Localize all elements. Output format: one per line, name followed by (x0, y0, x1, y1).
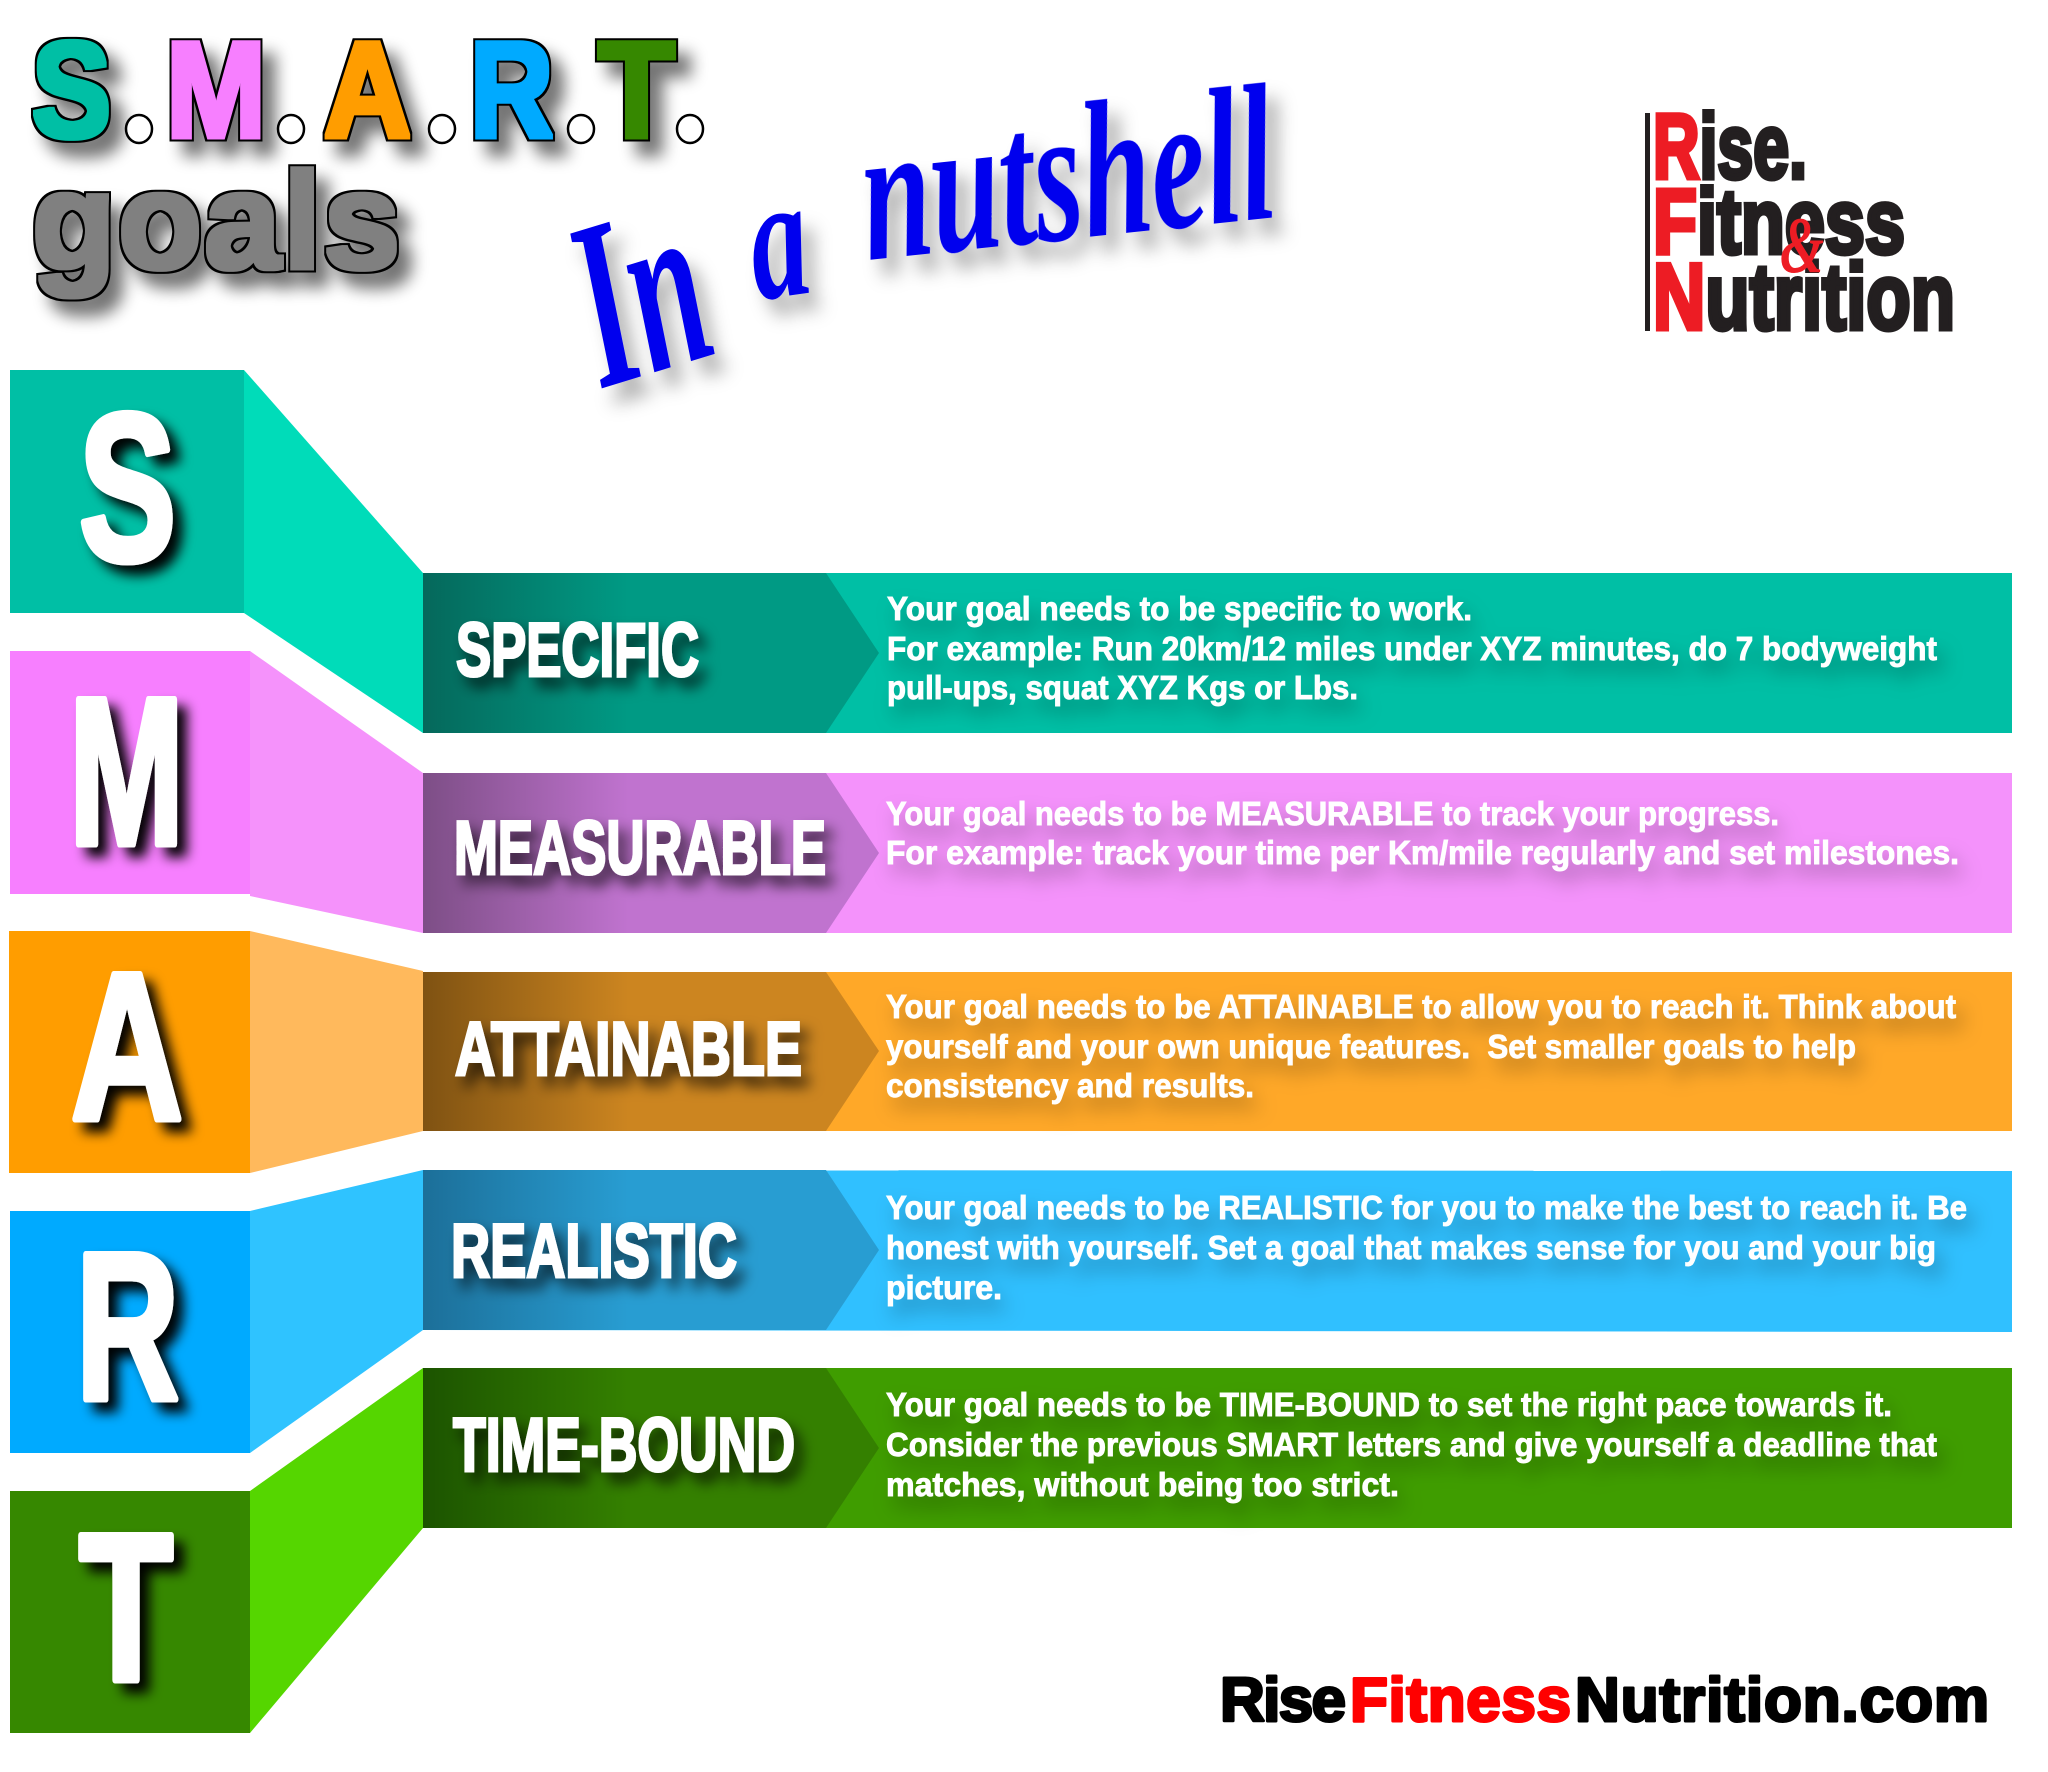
description T: Your goal needs to be TIME-BOUND to set the right pace towards it. (886, 1387, 1892, 1424)
ramp S (244, 370, 423, 733)
Fitness: Fitness (1350, 1666, 1571, 1735)
dot (677, 115, 703, 143)
description M (886, 796, 1959, 872)
word: In: In (539, 147, 737, 438)
description S: Your goal needs to be specific to work. (887, 591, 1472, 628)
letter tile S (10, 370, 244, 613)
big letter M: M (69, 654, 184, 889)
script heading: In a nutshell (539, 45, 1284, 438)
row M: Measurable (10, 651, 2012, 933)
ramp A (250, 931, 423, 1173)
big letter A: A (71, 929, 183, 1164)
logo line: Rise.: Rise. (1653, 96, 1807, 198)
label chevron T (423, 1368, 879, 1528)
label chevron S (423, 573, 879, 733)
description R: picture. (886, 1270, 1002, 1307)
row A: Attainable (9, 929, 2012, 1173)
description M: For example: track your time per Km/mile regularly and set milestones. (886, 835, 1959, 872)
band T (423, 1368, 2012, 1528)
description S: pull-ups, squat XYZ Kgs or Lbs. (887, 670, 1358, 707)
description A: yourself and your own unique features. Set smaller goals to help (886, 1029, 1856, 1066)
label chevron A (423, 972, 879, 1131)
description T: Consider the previous SMART letters and give yourself a deadline that (886, 1427, 1937, 1464)
description S: For example: Run 20km/12 miles under XYZ minutes, do 7 bodyweight (887, 631, 1937, 668)
description R (886, 1190, 1967, 1307)
dot (429, 115, 455, 143)
description A: Your goal needs to be ATTAINABLE to allow you to reach it. Think about (886, 989, 1956, 1026)
row T: Time-bound (10, 1368, 2012, 1733)
label REALISTIC: REALISTIC (451, 1209, 737, 1294)
description R: Your goal needs to be REALISTIC for you to make the best to reach it. Be (886, 1190, 1967, 1227)
title: S.M.A.R.T. (32, 14, 703, 167)
band A (423, 972, 2012, 1131)
big letter T: T (79, 1490, 173, 1725)
word: nutshell: nutshell (850, 45, 1284, 303)
letter R: R (470, 14, 553, 167)
letter tile T (10, 1491, 250, 1733)
website footer (1220, 1666, 1989, 1735)
logo: Rise. Fitness & Nutrition (1645, 96, 1955, 349)
label SPECIFIC: SPECIFIC (456, 608, 699, 693)
letter S: S (32, 14, 111, 167)
ramp M (250, 651, 423, 933)
description S (887, 591, 1937, 707)
dot (568, 115, 594, 143)
dot (126, 115, 152, 143)
title: goals: goals (32, 145, 400, 298)
description T (886, 1387, 1937, 1504)
ramp R (250, 1170, 423, 1453)
ramp T (250, 1368, 423, 1733)
description A (886, 989, 1956, 1105)
description R: honest with yourself. Set a goal that makes sense for you and your big (886, 1230, 1936, 1267)
description A: consistency and results. (886, 1068, 1254, 1105)
band S (423, 573, 2012, 733)
band R (423, 1170, 2012, 1332)
dot (278, 115, 304, 143)
big letter S: S (79, 370, 176, 605)
letter tile A (9, 931, 250, 1173)
letter M: M (166, 14, 266, 167)
Rise: Rise (1220, 1666, 1346, 1735)
description T: matches, without being too strict. (886, 1467, 1399, 1504)
label TIME-BOUND: TIME-BOUND (453, 1403, 795, 1488)
big letter R: R (76, 1209, 179, 1444)
label chevron M (423, 773, 879, 933)
description M: Your goal needs to be MEASURABLE to track your progress. (886, 796, 1779, 833)
letter T: T (598, 14, 675, 167)
letter A: A (324, 14, 411, 167)
row S: Specific (10, 370, 2012, 733)
Nutrition.com: Nutrition.com (1575, 1666, 1989, 1735)
band M (423, 773, 2012, 933)
letter tile M (10, 651, 250, 894)
row R: Realistic (10, 1170, 2012, 1453)
label chevron R (423, 1170, 879, 1330)
logo line: Fitness: Fitness (1653, 171, 1905, 273)
word: a: a (735, 137, 820, 338)
label MEASURABLE: MEASURABLE (454, 806, 826, 891)
letter tile R (10, 1211, 250, 1453)
logo line: Nutrition: Nutrition (1653, 244, 1955, 349)
logo ampersand: & (1780, 202, 1824, 290)
label ATTAINABLE: ATTAINABLE (455, 1007, 802, 1092)
